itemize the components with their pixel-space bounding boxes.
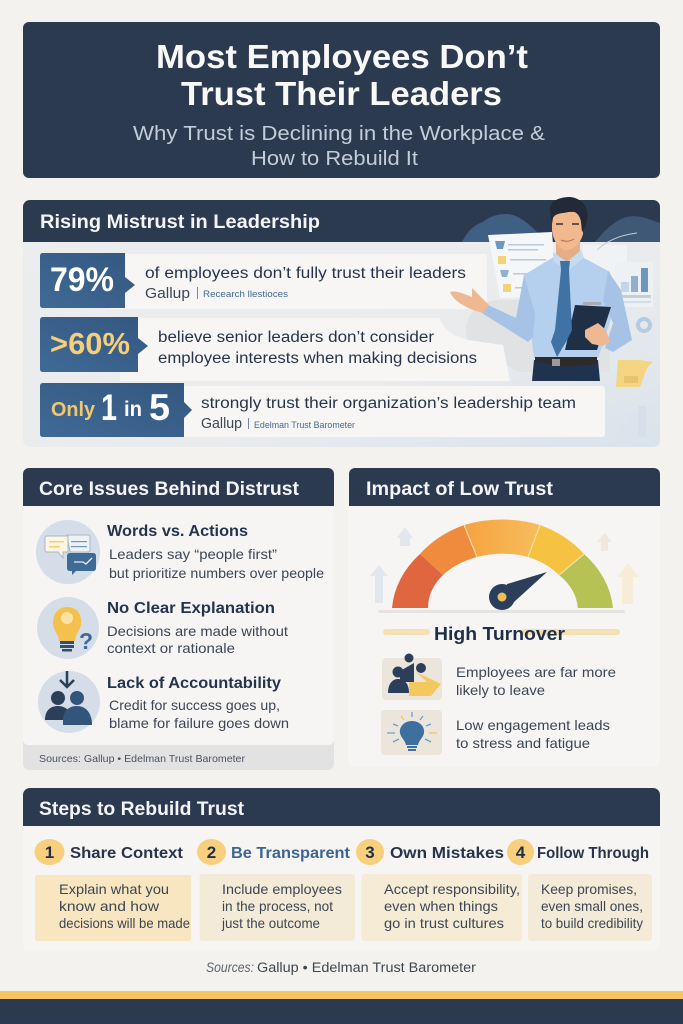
neck xyxy=(556,240,580,266)
title: Trust Their Leaders xyxy=(181,75,502,112)
step 1: Explain what you xyxy=(59,881,169,897)
gauge label xyxy=(383,624,620,644)
step 1: decisions will be made xyxy=(59,915,190,931)
issue: lack of accountability: Lack of Accountability xyxy=(107,675,281,692)
impact: leaving: likely to leave xyxy=(456,682,545,698)
panel heading: Core Issues Behind Distrust xyxy=(39,479,300,500)
issue: no clear explanation: context or rationale xyxy=(107,640,235,656)
tablet xyxy=(565,305,611,350)
illustration: documents and charts xyxy=(488,232,653,387)
step 2: Be Transparent xyxy=(231,845,350,862)
step 1: 1 xyxy=(45,843,54,862)
panel: core issues xyxy=(23,468,334,770)
issue: words vs actions: but prioritize numbers over people xyxy=(109,565,324,581)
issue: lack of accountability: Credit for success goes up, xyxy=(109,697,280,713)
panel heading: Steps to Rebuild Trust xyxy=(39,799,245,820)
title panel xyxy=(23,22,660,178)
impact: fatigue: to stress and fatigue xyxy=(456,735,590,751)
step 4: to build credibility xyxy=(541,915,643,931)
right arm xyxy=(603,271,632,352)
step 2: Include employees xyxy=(222,881,342,897)
icon: light bulb with question mark: ? xyxy=(79,628,93,654)
impact: fatigue: Low engagement leads xyxy=(456,717,610,733)
left hand xyxy=(450,288,489,313)
stat row: 79%: 79% xyxy=(50,261,114,299)
issue: words vs actions: Words vs. Actions xyxy=(107,523,248,540)
face xyxy=(556,223,579,225)
impact: fatigue xyxy=(381,710,610,755)
gauge chart xyxy=(378,519,625,613)
sources line: Gallup • Edelman Trust Barometer xyxy=(257,960,477,975)
step 2: in the process, not xyxy=(222,898,333,914)
background decoration xyxy=(462,214,660,437)
collar xyxy=(553,250,584,269)
stat row: 79% xyxy=(40,253,487,309)
panel heading: Rising Mistrust in Leadership xyxy=(40,212,320,233)
step 3: Accept responsibility, xyxy=(384,881,520,897)
hair xyxy=(550,197,588,232)
panel: rising mistrust xyxy=(23,197,660,447)
step 3: 3 xyxy=(365,843,375,862)
step 2: just the outcome xyxy=(221,915,320,931)
step 4: Keep promises, xyxy=(541,881,637,897)
step 3: go in trust cultures xyxy=(384,915,504,931)
step 1: Share Context xyxy=(70,845,183,862)
stat row: 79%: of employees don’t fully trust their leaders xyxy=(145,265,466,282)
issue: no clear explanation: Decisions are made without xyxy=(107,623,288,639)
subtitle xyxy=(133,123,546,170)
subtitle: How to Rebuild It xyxy=(251,148,418,170)
sources line: Sources: xyxy=(206,960,254,975)
icon: people leaving xyxy=(382,654,442,700)
stat row: only 1 in 5: Only xyxy=(51,399,96,421)
issue: no clear explanation: No Clear Explanation xyxy=(107,600,275,617)
gauge label: High Turnover xyxy=(434,624,565,644)
belt xyxy=(535,357,597,367)
icon: people with down arrow xyxy=(38,671,100,733)
stat row: only 1 in 5: in xyxy=(124,398,142,421)
title xyxy=(156,38,528,112)
step 3: Own Mistakes xyxy=(390,845,504,862)
faint arrows xyxy=(370,527,639,604)
stat row: over 60%: employee interests when making decisions xyxy=(158,350,477,367)
step 4: Follow Through xyxy=(537,845,649,862)
gauge needle xyxy=(489,572,547,610)
subtitle: Why Trust is Declining in the Workplace & xyxy=(133,123,546,145)
icon: dim light bulb xyxy=(381,710,442,755)
title: Most Employees Don’t xyxy=(156,38,528,75)
right hand xyxy=(585,323,610,346)
panel heading: Impact of Low Trust xyxy=(366,479,554,500)
step 4: 4 xyxy=(516,843,526,862)
sources note: Sources: Gallup • Edelman Trust Barometer xyxy=(39,753,245,765)
stat row: only 1 in 5: 5 xyxy=(149,387,170,428)
step 4: even small ones, xyxy=(541,898,643,914)
stat row: 79%: Recearch llestioces xyxy=(203,289,288,300)
issue: words vs actions: Leaders say “people first” xyxy=(109,546,277,562)
step 1: know and how xyxy=(59,898,160,914)
stat row: only 1 in 5: Gallup xyxy=(201,416,242,432)
pants xyxy=(532,360,600,381)
step 4 xyxy=(507,839,652,941)
issue: lack of accountability: blame for failure goes down xyxy=(109,715,289,731)
stat row: over 60%: believe senior leaders don’t consider xyxy=(158,329,434,346)
stat row: 79%: Gallup xyxy=(145,286,190,302)
stat row: over 60%: >60% xyxy=(50,326,130,361)
illustration: businessman xyxy=(450,197,632,381)
torso xyxy=(524,252,614,358)
step 2: 2 xyxy=(207,843,216,862)
left arm xyxy=(482,275,535,342)
tie xyxy=(551,261,572,357)
issue: lack of accountability xyxy=(38,671,289,733)
issue: words vs actions xyxy=(36,520,324,584)
step 1 xyxy=(34,839,191,941)
stat row: only 1 in 5 xyxy=(40,383,605,437)
stat row: only 1 in 5: strongly trust their organization’s leadership team xyxy=(201,395,576,412)
icon: light bulb with question mark xyxy=(37,597,99,659)
impact: leaving: Employees are far more xyxy=(456,664,616,680)
issue: no clear explanation xyxy=(37,597,288,659)
footer band xyxy=(0,991,683,1024)
impact: leaving xyxy=(382,654,616,700)
step 2 xyxy=(197,839,355,941)
step 3 xyxy=(356,839,522,941)
stat row: only 1 in 5: Edelman Trust Barometer xyxy=(254,420,355,431)
panel: impact of low trust xyxy=(348,468,660,767)
stat row: over 60% xyxy=(40,317,510,381)
stat row: only 1 in 5: 1 xyxy=(101,387,117,428)
step 3: even when things xyxy=(384,898,498,914)
icon: speech bubbles xyxy=(36,520,100,584)
head xyxy=(552,212,583,250)
panel: steps to rebuild trust xyxy=(23,788,660,950)
